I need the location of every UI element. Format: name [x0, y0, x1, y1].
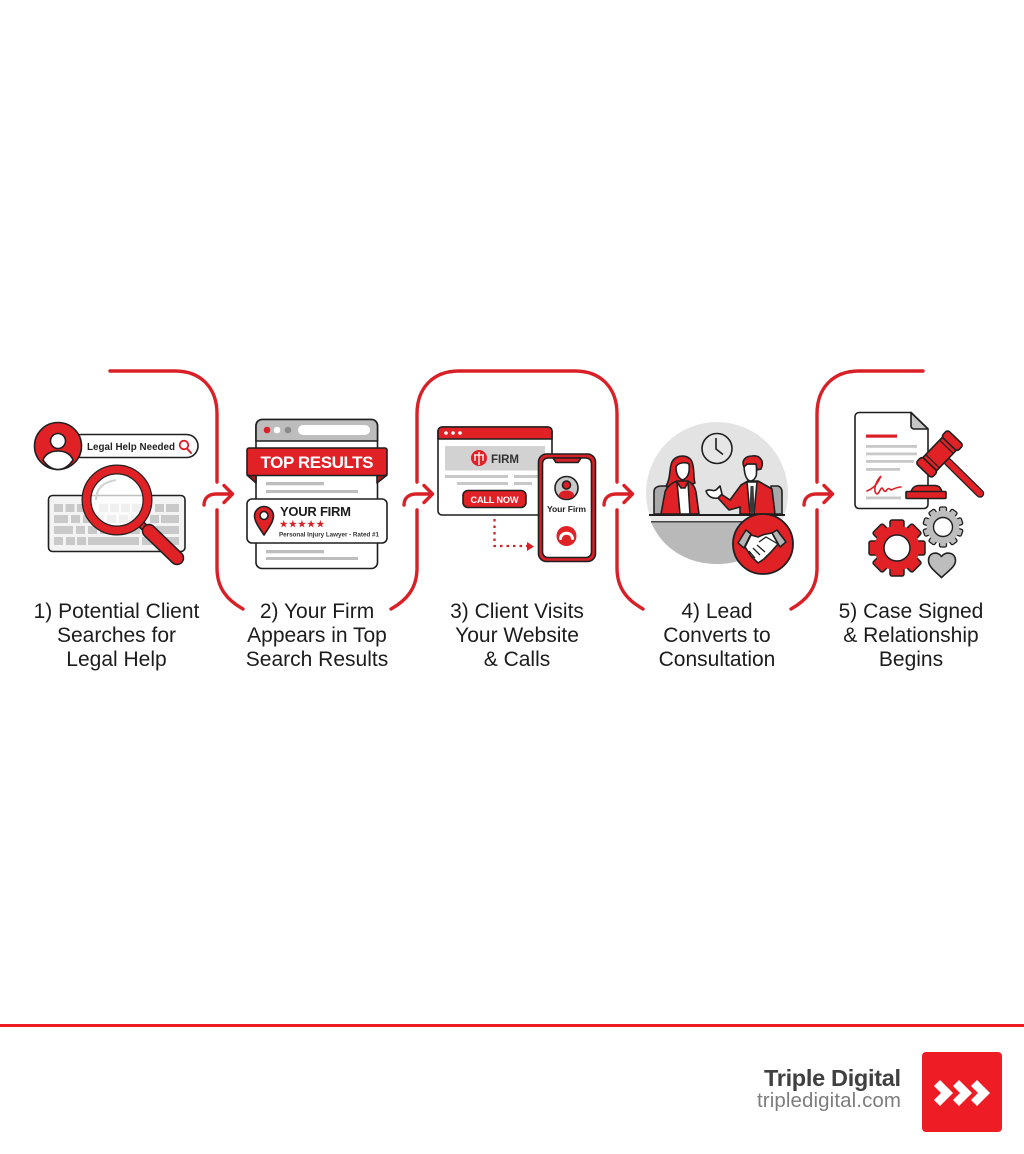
brand url: tripledigital.com [757, 1089, 901, 1112]
connector: step 3 to step 4 [604, 486, 643, 609]
woman [654, 456, 699, 514]
connector: step 1 to step 2 [110, 371, 243, 609]
card: your firm: YOUR FIRM [280, 504, 351, 519]
gavel [906, 430, 980, 498]
icon: website and phone call [438, 427, 596, 562]
icon: client search on keyboard [34, 422, 198, 558]
step 5 caption: & Relationship [843, 624, 979, 647]
step 3 caption: 3) Client Visits [450, 600, 584, 623]
document [855, 412, 928, 508]
banner: top results: TOP RESULTS [260, 453, 374, 472]
man [706, 456, 782, 514]
step 1 caption: Legal Help [66, 648, 167, 671]
icon: avatar [34, 422, 82, 470]
logo [922, 1052, 1002, 1132]
step 1 caption: 1) Potential Client [34, 600, 200, 623]
step 2 caption: Appears in Top [247, 624, 387, 647]
step 5 caption: Begins [879, 648, 943, 671]
clock [702, 434, 732, 464]
gear: large red [869, 520, 925, 576]
step 2 caption: Search Results [246, 648, 388, 671]
search pill [70, 434, 198, 458]
background circle [646, 422, 788, 564]
button: call now [463, 490, 526, 508]
browser window [256, 420, 378, 568]
connector: step 4 to step 5 [791, 371, 923, 609]
icon: keyboard [48, 496, 185, 552]
result lines [266, 482, 358, 560]
brand name: Triple Digital [764, 1065, 901, 1091]
icon: handshake badge [733, 514, 793, 574]
phone: Your Firm [547, 504, 586, 514]
step 4 caption: Consultation [659, 648, 775, 671]
website window: FIRM [491, 454, 519, 466]
dotted arrow [494, 519, 534, 551]
icon: search results page [247, 420, 387, 568]
step 5 caption: 5) Case Signed [839, 600, 983, 623]
website window [438, 427, 552, 515]
step 1 caption: Searches for [57, 624, 176, 647]
connector: step 2 to step 3 [391, 371, 617, 609]
step 4 caption: Converts to [663, 624, 771, 647]
icon: signed case documents [855, 412, 980, 578]
banner: top results [247, 448, 387, 483]
icon: consultation meeting [646, 422, 793, 574]
table [649, 514, 785, 522]
card: your firm: ★★★★★ [279, 518, 326, 530]
heart [928, 553, 956, 578]
step 4 caption: 4) Lead [681, 600, 753, 623]
button: call now: CALL NOW [470, 495, 519, 505]
card: your firm: Personal Injury Lawyer - Rated #1 [279, 532, 379, 538]
step 3 caption: Your Website [455, 624, 579, 647]
phone [538, 454, 596, 562]
footer rule [0, 1024, 1024, 1027]
search pill: Legal Help Needed [87, 442, 175, 453]
card: your firm [247, 499, 387, 543]
gear: small gray [923, 507, 963, 547]
step 2 caption: 2) Your Firm [260, 600, 374, 623]
icon: magnifying glass [86, 470, 177, 558]
step 3 caption: & Calls [484, 648, 550, 671]
